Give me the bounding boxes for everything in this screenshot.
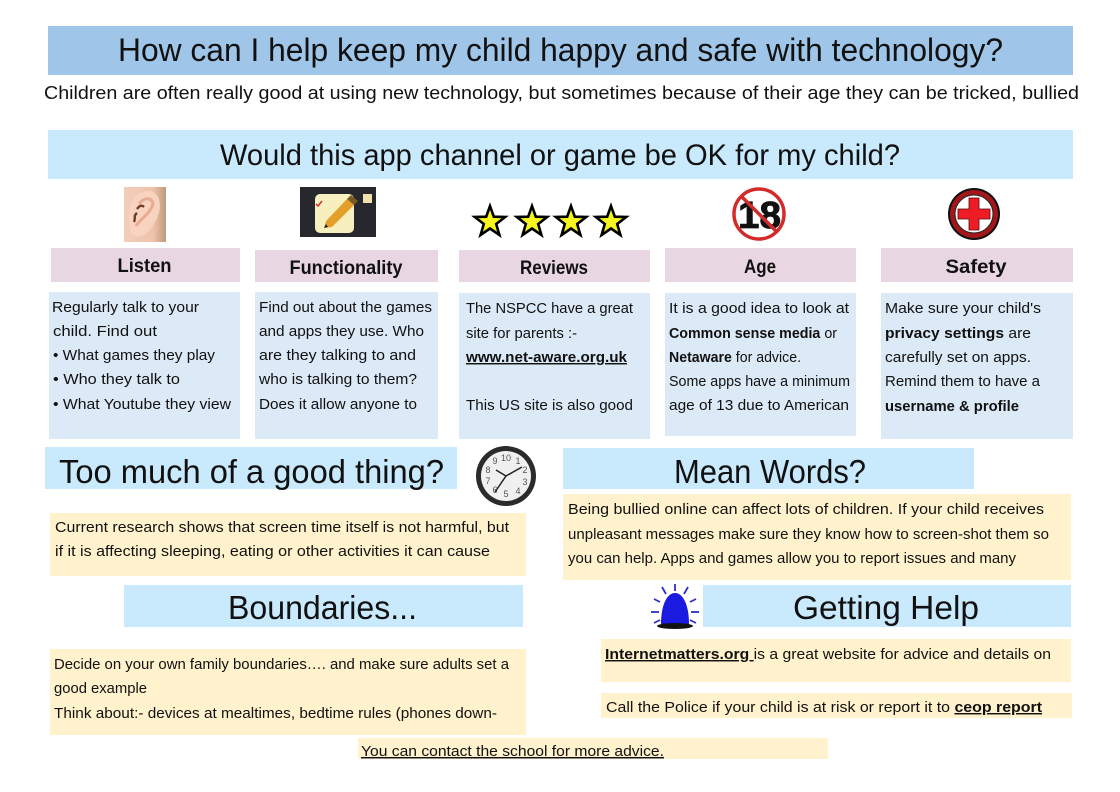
panel: age	[665, 248, 856, 436]
heading: listen: Listen	[118, 256, 172, 277]
age text: Some apps have a minimum	[669, 374, 850, 390]
title: How can I help keep my child happy and safe with technology?	[118, 32, 1003, 68]
listen text: child. Find out	[53, 324, 157, 340]
heading: safety: Safety	[946, 257, 1007, 278]
functionality text	[258, 300, 432, 413]
age text: age of 13 due to American	[669, 398, 849, 414]
panel: mean words text: Being bullied online can affect lots of children. If your child receives	[568, 502, 1044, 518]
heading: reviews: Reviews	[520, 258, 588, 279]
age text: Common sense media or	[669, 326, 837, 342]
icon: safety cross	[948, 188, 1000, 240]
heading: functionality: Functionality	[290, 258, 403, 279]
reviews text	[465, 301, 633, 414]
safety text	[885, 301, 1041, 415]
icon: clock	[476, 446, 536, 506]
icon: notepad and pencil	[300, 187, 376, 237]
safety text: Make sure your child's	[885, 301, 1041, 317]
school contact callout	[358, 738, 828, 760]
heading: would this app be OK: Would this app channel or game be OK for my child?	[220, 139, 900, 172]
panel: functionality	[255, 250, 438, 439]
heading: getting help: Getting Help	[793, 589, 979, 626]
icon: clock: 4	[515, 486, 521, 496]
functionality text: Does it allow anyone to	[259, 397, 417, 413]
intro text: Children are often really good at using new technology, but sometimes because of their age they can be tricked, bullied	[44, 82, 1079, 103]
icon: clock: 5	[503, 489, 509, 499]
panel: mean words text	[563, 494, 1071, 580]
icon: clock: 1	[515, 456, 521, 466]
icon: clock: 6	[492, 485, 498, 495]
age text: Netaware for advice.	[669, 350, 801, 366]
panel: internetmatters text	[601, 639, 1071, 682]
safety text: username & profile	[885, 399, 1019, 415]
reviews text: This US site is also good	[466, 398, 633, 414]
heading: getting help	[703, 585, 1071, 627]
panel: screen time text: Current research shows that screen time itself is not harmful, but	[55, 520, 509, 536]
safety text: Remind them to have a	[885, 374, 1041, 390]
panel: listen	[49, 248, 240, 439]
heading: age: Age	[744, 257, 776, 278]
icon: clock: 3	[522, 477, 528, 487]
icon: clock: 9	[492, 456, 498, 466]
icon: clock: 8	[485, 465, 491, 475]
panel: police text	[601, 693, 1072, 718]
listen text: Regularly talk to your	[52, 300, 199, 316]
functionality text: Find out about the games	[259, 300, 432, 316]
reviews text: site for parents :-	[466, 326, 577, 342]
panel: mean words text: unpleasant messages make sure they know how to screen-shot them so	[568, 527, 1049, 543]
listen text: • What games they play	[53, 348, 216, 364]
panel: screen time text	[50, 513, 526, 576]
icon: clock: 7	[485, 476, 491, 486]
panel: boundaries text: Decide on your own family boundaries…. and make sure adults set a	[54, 657, 510, 673]
panel: police text: Call the Police if your child is at risk or report it to ceop report	[606, 700, 1042, 716]
icon: ear	[124, 187, 166, 242]
panel: mean words text: you can help. Apps and games allow you to report issues and many	[568, 551, 1017, 567]
icon: blue police light	[651, 584, 699, 629]
listen text: • Who they talk to	[53, 372, 180, 388]
heading: boundaries	[124, 585, 523, 627]
safety text: privacy settings are	[885, 326, 1031, 342]
heading: mean words: Mean Words?	[674, 453, 866, 490]
functionality text: and apps they use. Who	[259, 324, 424, 340]
heading: would this app be OK	[48, 130, 1073, 179]
listen text: • What Youtube they view	[53, 397, 232, 413]
panel: boundaries text	[50, 649, 526, 735]
listen text	[52, 300, 232, 413]
panel: boundaries text: Think about:- devices at mealtimes, bedtime rules (phones down-	[54, 706, 497, 722]
heading: boundaries: Boundaries...	[228, 589, 417, 626]
icon: four stars	[475, 206, 626, 235]
panel: boundaries text: good example	[54, 681, 147, 697]
panel: safety	[881, 248, 1073, 439]
age text	[669, 301, 850, 414]
panel: internetmatters text: Internetmatters.org is a great website for advice and details on	[605, 647, 1051, 663]
school contact callout: You can contact the school for more advice.	[361, 744, 664, 760]
panel: screen time text: if it is affecting sleeping, eating or other activities it can cause	[55, 544, 490, 560]
icon: no under 18: 18	[738, 195, 781, 237]
title	[48, 26, 1073, 75]
functionality text: are they talking to and	[259, 348, 416, 364]
functionality text: who is talking to them?	[258, 372, 417, 388]
heading: mean words	[563, 448, 974, 490]
heading: too much of a good thing: Too much of a good thing?	[59, 453, 444, 490]
safety text: carefully set on apps.	[885, 350, 1031, 366]
age text: It is a good idea to look at	[669, 301, 849, 317]
icon: clock: 2	[522, 465, 528, 475]
icon: clock: 10	[501, 453, 511, 463]
panel: reviews	[459, 250, 650, 439]
reviews text: The NSPCC have a great	[466, 301, 633, 317]
reviews text: www.net-aware.org.uk	[465, 350, 628, 366]
